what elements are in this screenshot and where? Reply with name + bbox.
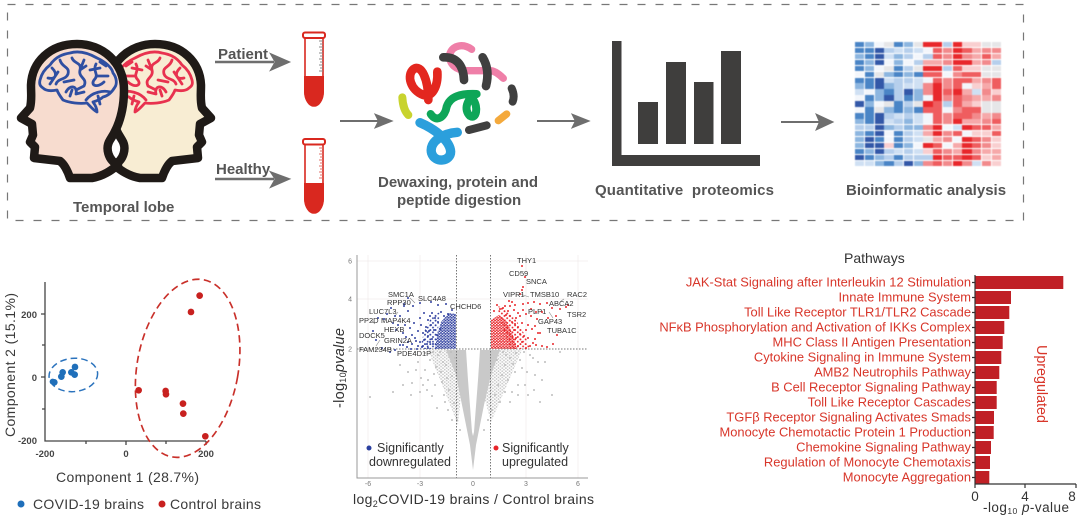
chart: volcano plot: 10 <box>338 372 348 383</box>
pathway labels: MHC Class II Antigen Presentation <box>773 334 971 350</box>
gene labels: SMC1A <box>388 290 414 299</box>
pathway labels: JAK-Stat Signaling after Interleukin 12 Stimulation <box>686 274 971 290</box>
label: Patient: Patient <box>218 46 268 63</box>
label: Bioinformatic analysis: Bioinformatic analysis <box>846 182 1006 199</box>
gene labels: GAP43 <box>538 317 562 326</box>
chart: volcano plot: pvalue <box>332 328 348 373</box>
gene labels <box>359 256 587 358</box>
gene labels: RAC2 <box>567 290 587 299</box>
gene labels: MAP4K4 <box>381 316 411 325</box>
chart: volcano plot <box>332 255 594 509</box>
chart: volcano plot: 3 <box>524 481 528 488</box>
arrow: to bioinformatics <box>781 115 832 129</box>
chart: PCA scatter: 0 <box>123 449 129 460</box>
legend: upregulated <box>494 441 569 469</box>
chart: PCA scatter <box>2 271 253 485</box>
gene labels: RPP30 <box>387 298 411 307</box>
legend: PCA groups <box>18 496 261 512</box>
heading: Pathways: Pathways <box>844 250 905 266</box>
gene labels: PLP1 <box>528 307 546 316</box>
pathway labels: B Cell Receptor Signaling Pathway <box>771 380 972 394</box>
arrow: to proteomics <box>537 115 588 127</box>
chart: PCA scatter: -200 <box>18 436 37 447</box>
pathway labels: Chemokine Signaling Pathway <box>796 440 972 454</box>
gene labels: HEXB <box>384 325 404 334</box>
chart: volcano plot: 2 <box>348 346 352 354</box>
chart: volcano plot: -log <box>332 383 348 408</box>
label: digestion: Dewaxing, protein and <box>378 174 538 191</box>
chart: volcano plot: 6 <box>576 481 580 488</box>
pathway labels: TGFβ Receptor Signaling Activates Smads <box>726 410 971 424</box>
icon: bar chart <box>612 41 760 166</box>
chart: PCA scatter: -200 <box>35 449 55 460</box>
chart: volcano plot: log <box>353 491 372 507</box>
chart: PCA scatter: 0 <box>32 373 37 384</box>
gene labels: CD59 <box>509 269 528 278</box>
chart: volcano plot: 6 <box>348 258 352 266</box>
pathway labels: Regulation of Monocyte Chemotaxis <box>764 454 971 470</box>
label: Quantitative proteomics: Quantitative proteomics <box>595 182 774 199</box>
pathway labels: AMB2 Neutrophils Pathway <box>814 364 972 380</box>
gene labels: TSR2 <box>567 310 586 319</box>
pathway labels: Toll Like Receptor TLR1/TLR2 Cascade <box>744 304 971 320</box>
icon: healthy test tube <box>303 139 325 213</box>
pathway labels: Cytokine Signaling in Immune System <box>754 350 971 364</box>
legend: downregulated: Significantly <box>377 441 444 455</box>
pathway labels: Toll Like Receptor Cascades <box>808 394 971 410</box>
chart: volcano plot: 4 <box>348 296 352 304</box>
legend: PCA groups: COVID-19 brains <box>33 496 144 512</box>
label: digestion <box>378 174 538 209</box>
gene labels: LUC7L3 <box>369 307 397 316</box>
icon: two heads with brains <box>21 44 211 178</box>
pathway labels <box>659 274 972 484</box>
chart: pathways bar chart: 0 <box>971 489 979 504</box>
icon: patient test tube <box>303 32 325 106</box>
pathway labels: Monocyte Chemotactic Protein 1 Production <box>720 424 971 440</box>
chart: volcano plot: 2 <box>373 499 378 509</box>
chart: volcano plot: -3 <box>417 481 423 488</box>
grey non-significant points <box>370 350 560 470</box>
gene labels: FAM234B <box>359 345 392 354</box>
pathway labels: Monocyte Aggregation <box>843 470 971 484</box>
pathway bars <box>975 276 1063 484</box>
pathway labels: NFκB Phosphorylation and Activation of IKKs Complex <box>659 320 972 334</box>
chart: PCA scatter: 200 <box>198 449 214 460</box>
chart: pathways bar chart: -value <box>1030 500 1069 515</box>
gene labels: SNCA <box>526 277 547 286</box>
icon: peptide squiggles <box>402 46 514 160</box>
chart: volcano plot: COVID-19 brains / Control brains <box>378 491 594 507</box>
legend: downregulated: downregulated <box>369 455 451 469</box>
gene labels: VIPR1 <box>503 290 525 299</box>
gene leader lines <box>371 294 564 346</box>
legend: upregulated: upregulated <box>502 455 568 469</box>
legend: downregulated <box>366 441 451 469</box>
chart: pathways bar chart: 4 <box>1021 489 1029 504</box>
legend: PCA groups: Control brains <box>170 496 261 512</box>
arrow: patient <box>215 55 288 69</box>
arrow: to digestion <box>340 115 391 127</box>
gene labels: PDE4D1P <box>397 349 431 358</box>
chart: volcano plot: -6 <box>365 481 371 488</box>
gene labels: GRIN2A <box>384 336 412 345</box>
gene labels: TMSB10 <box>530 290 559 299</box>
gene labels: TUBA1C <box>547 326 577 335</box>
gene labels: SLC4A8 <box>418 294 446 303</box>
legend: upregulated: Significantly <box>502 441 569 455</box>
chart: pathways bar chart: -log <box>983 500 1007 515</box>
pathway labels: Innate Immune System <box>838 290 971 304</box>
chart: PCA scatter: 200 <box>21 310 37 321</box>
chart: pathways bar chart: p <box>1018 500 1030 515</box>
gene labels: DOCK5 <box>359 331 385 340</box>
chart: pathways bar chart: 8 <box>1068 489 1076 504</box>
chart: PCA scatter: Component 1 (28.7%) <box>56 469 199 485</box>
chart: heatmap <box>854 41 1002 167</box>
gene labels: THY1 <box>517 256 536 265</box>
gene labels: CHCHD6 <box>450 302 481 311</box>
chart: PCA scatter: Component 2 (15.1%) <box>2 293 18 437</box>
red significant points <box>491 266 568 349</box>
blue significant points <box>373 298 456 352</box>
arrow: healthy <box>215 173 288 186</box>
label: Healthy: Healthy <box>216 161 271 178</box>
chart: pathways bar chart: 10 <box>1007 506 1018 516</box>
label: Temporal lobe: Temporal lobe <box>73 199 174 216</box>
gene labels: ABCA2 <box>549 299 574 308</box>
chart: pathways bar chart <box>659 250 1076 516</box>
label: Upregulated: Upregulated <box>1033 345 1049 423</box>
chart: volcano plot: 0 <box>471 481 475 488</box>
label: digestion: peptide digestion <box>397 192 521 209</box>
gene labels: PP2D <box>359 316 379 325</box>
